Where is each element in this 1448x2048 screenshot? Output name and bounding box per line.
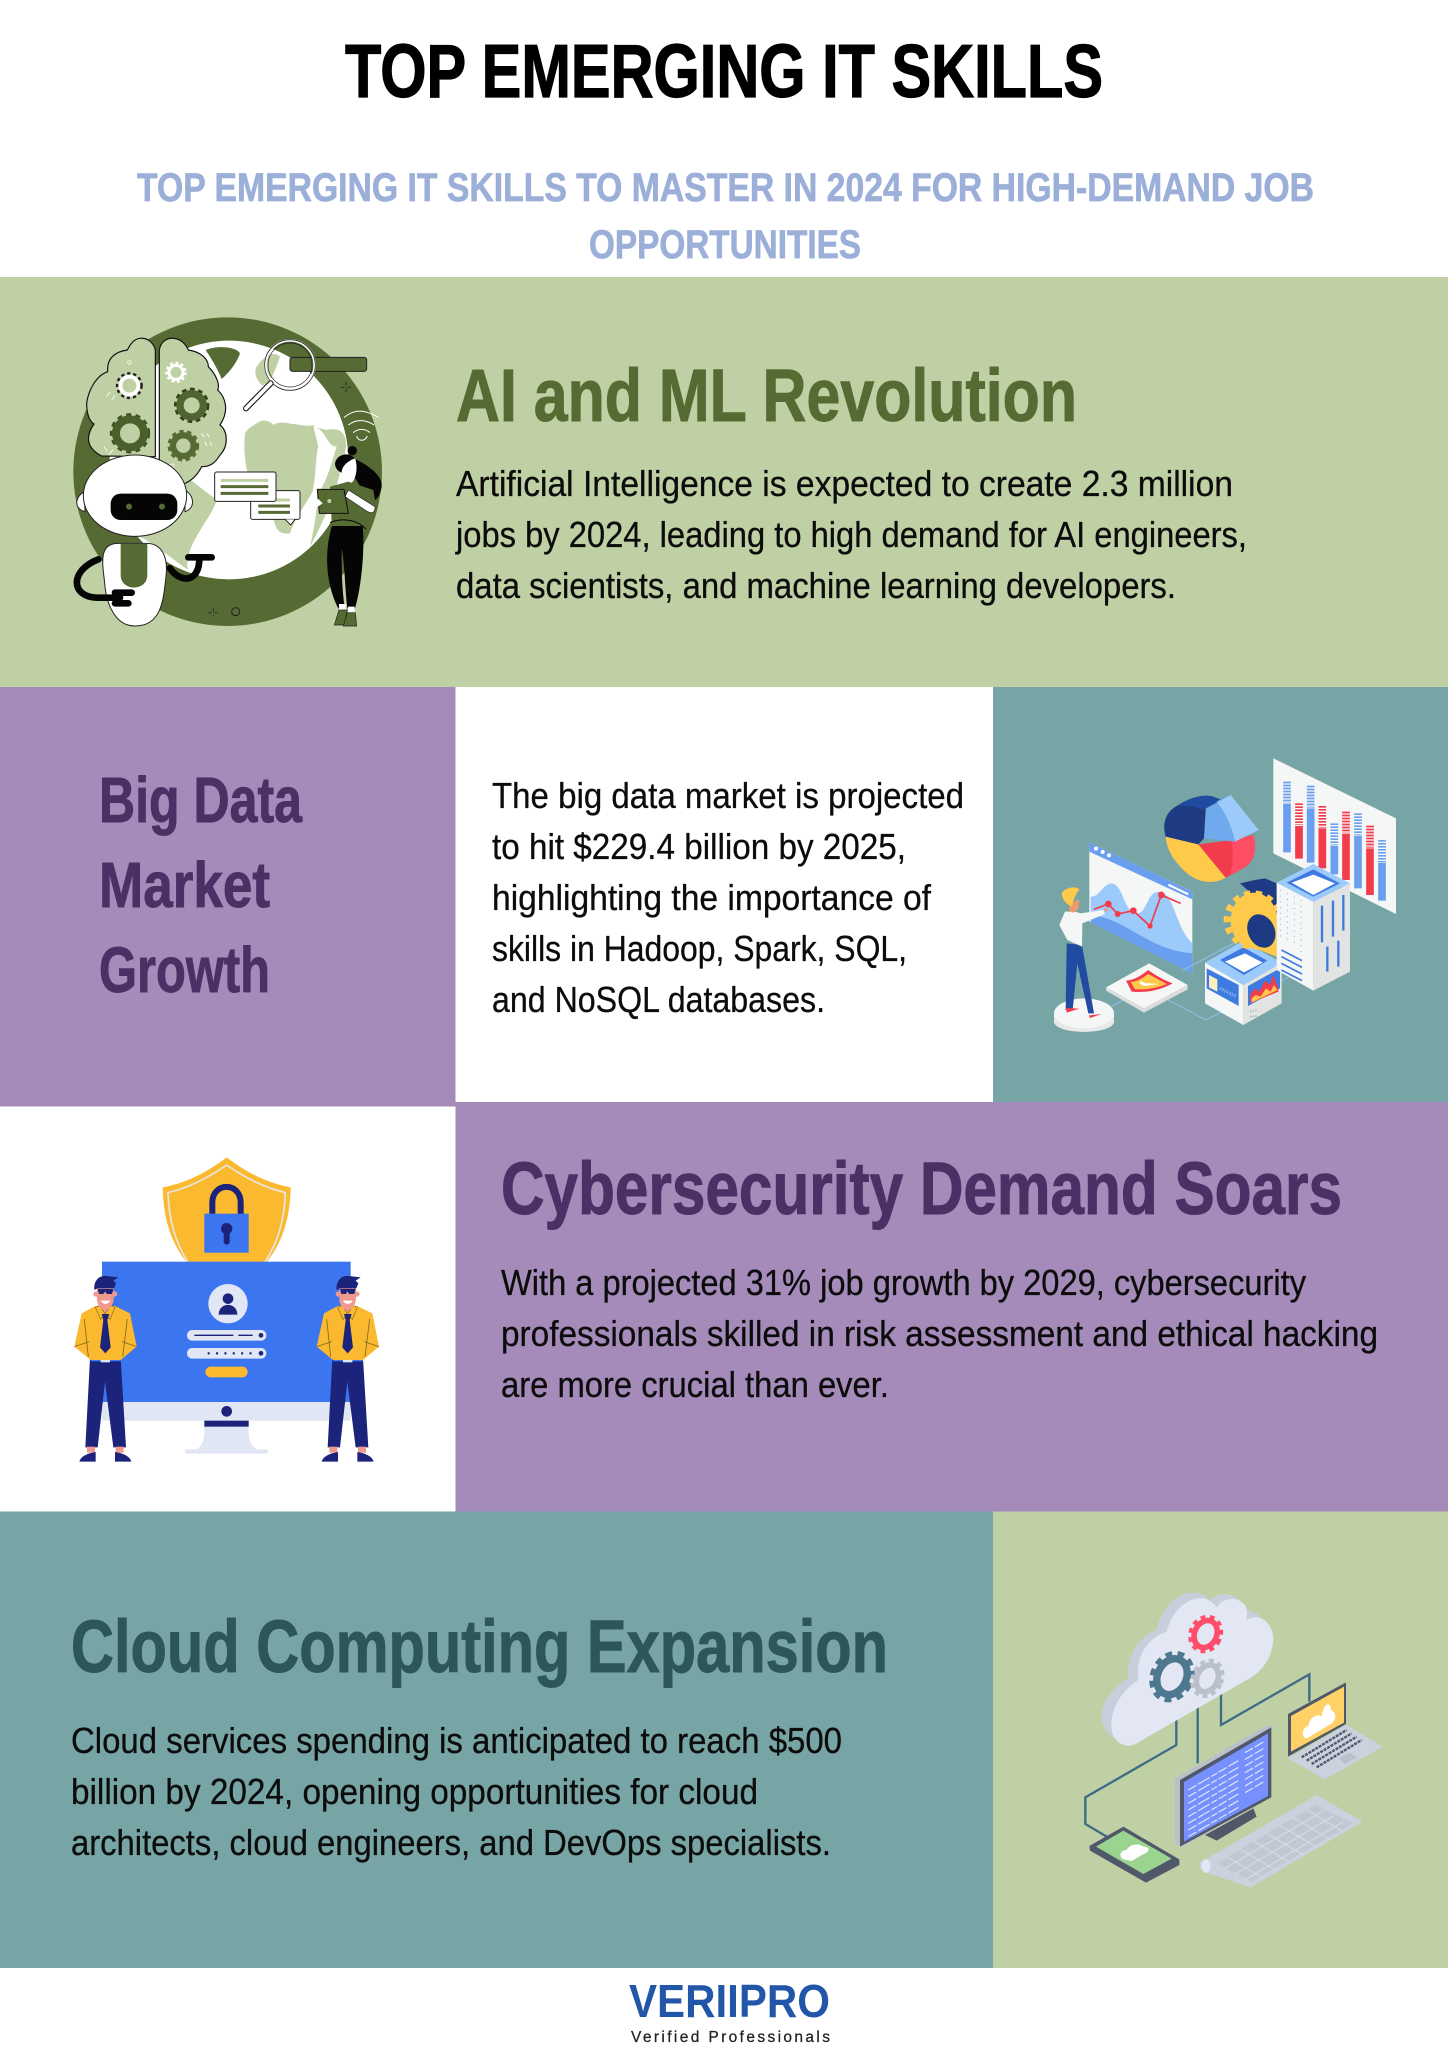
line chart screen — [1089, 842, 1192, 973]
panel: Big Data illustration — [993, 687, 1448, 1102]
panel: Big Data body: and NoSQL databases. — [492, 979, 825, 1020]
robot — [77, 455, 192, 626]
woman — [348, 457, 382, 501]
heading: Big Data Market Growth: Big Data — [99, 764, 302, 836]
pie chart — [1166, 837, 1226, 882]
subtitle — [137, 166, 1314, 267]
padlock — [212, 1187, 241, 1215]
chat bubbles — [251, 491, 300, 519]
heading: AI and ML Revolution: AI and ML Revolution — [456, 354, 1077, 437]
text: AI body: Artificial Intelligence is expected to create 2.3 million — [456, 463, 1233, 504]
keyboard — [1200, 1795, 1363, 1887]
panel: Big Data heading — [0, 687, 456, 1106]
bar chart — [1287, 782, 1382, 901]
logo: VERIIPRO — [629, 1975, 830, 2046]
icon: shield, monitor and two guards — [74, 1157, 379, 1462]
panel: Big Data body: The big data market is projected — [492, 775, 964, 816]
gear — [1243, 885, 1280, 922]
monitor — [102, 1262, 351, 1402]
icon: AI globe with robot, brain and woman — [73, 317, 382, 626]
panel: Cybersecurity Demand Soars — [456, 1102, 1448, 1512]
heading: Big Data Market Growth — [99, 764, 302, 1006]
text: Cloud body: Cloud services spending is anticipated to reach $500 — [71, 1720, 842, 1761]
text: Cloud body — [71, 1720, 842, 1863]
gears — [113, 361, 207, 467]
text: Cybersecurity body: are more crucial than ever. — [501, 1364, 889, 1405]
laptop — [1288, 1725, 1383, 1779]
text: Cybersecurity body: professionals skilled in risk assessment and ethical hacking — [501, 1313, 1378, 1354]
cloud — [1101, 1593, 1260, 1743]
icon: isometric cloud network — [1085, 1593, 1383, 1887]
brain — [87, 338, 226, 484]
panel: Big Data body — [456, 687, 993, 1102]
text: AI body — [455, 463, 1247, 606]
monitor — [1205, 1808, 1257, 1841]
person on pedestal — [1054, 1013, 1114, 1032]
logo: VERIIPRO: VERIIPRO — [629, 1975, 830, 2027]
panel: Big Data body: highlighting the importance of — [492, 877, 932, 918]
tower server — [1277, 883, 1313, 991]
text: AI body: jobs by 2024, leading to high demand for AI engineers, — [455, 514, 1247, 555]
heading: Cloud Computing Expansion: Cloud Computing Expansion — [71, 1605, 888, 1688]
icon: isometric data dashboard — [1054, 758, 1396, 1032]
wifi and sparkles — [344, 411, 379, 440]
text: AI body: data scientists, and machine learning developers. — [456, 565, 1176, 606]
logo: VERIIPRO: Verified Professionals — [631, 2029, 830, 2046]
subtitle: OPPORTUNITIES — [589, 223, 861, 267]
magnifier and search bar — [290, 357, 367, 371]
text: Cloud body: architects, cloud engineers, and DevOps specialists. — [71, 1822, 831, 1863]
heading: Big Data Market Growth: Growth — [99, 934, 270, 1006]
wires — [1085, 1674, 1309, 1837]
panel: Big Data body: to hit $229.4 billion by 2025, — [492, 826, 906, 867]
panel: Cloud Computing Expansion — [0, 1512, 993, 1968]
text: Cybersecurity body — [501, 1262, 1378, 1405]
title: TOP EMERGING IT SKILLS — [345, 29, 1103, 113]
panel: Cloud illustration — [993, 1512, 1448, 1968]
guards — [74, 1276, 379, 1462]
login form — [208, 1284, 248, 1323]
heading: Big Data Market Growth: Market — [99, 849, 270, 921]
connector lines — [1112, 940, 1288, 1020]
text: Cybersecurity body: With a projected 31% job growth by 2029, cybersecurity — [501, 1262, 1306, 1303]
text: Cloud body: billion by 2024, opening opportunities for cloud — [71, 1771, 758, 1812]
small server — [1205, 963, 1243, 1025]
panel: Big Data body: skills in Hadoop, Spark, SQL, — [492, 928, 907, 969]
cloud gears — [1145, 1612, 1228, 1706]
shield tile — [1106, 963, 1188, 1008]
panel: AI and ML Revolution — [0, 277, 1448, 687]
tablet — [1089, 1827, 1179, 1883]
panel: Cybersecurity illustration — [0, 1106, 456, 1512]
